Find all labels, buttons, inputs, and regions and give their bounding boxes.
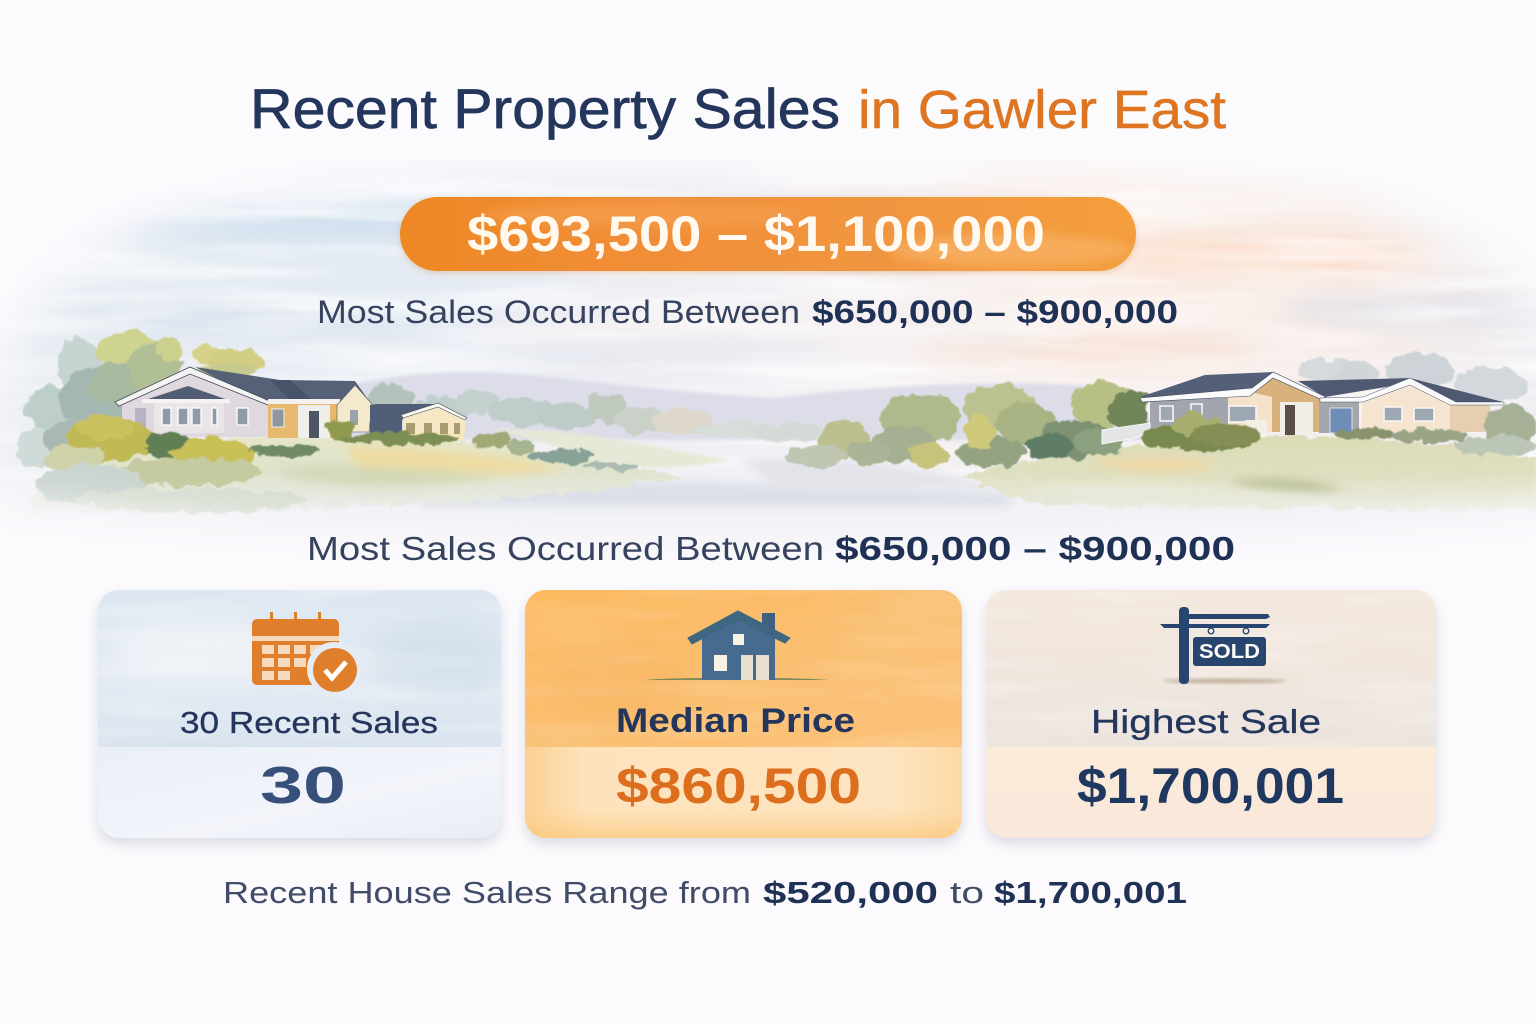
footer range statement: to — [950, 875, 984, 910]
panel: median price — [525, 590, 962, 838]
subheading: most sales upper: $650,000 – $900,000 — [812, 294, 1178, 330]
label: median price: Median Price — [616, 702, 855, 740]
icon: house — [645, 611, 828, 680]
landscape illustration — [0, 172, 1536, 530]
right bushes — [1140, 406, 1536, 455]
small right house on left — [370, 403, 467, 440]
footer range statement: $520,000 — [763, 875, 938, 910]
footer range statement: Recent House Sales Range from — [223, 875, 751, 910]
ground washes — [422, 456, 1149, 514]
title: Recent Property Sales — [250, 77, 840, 140]
distant hills — [340, 372, 1180, 440]
value: 30: 30 — [260, 757, 346, 815]
background tree line — [366, 352, 1528, 441]
sky with watercolor clouds — [0, 172, 1536, 486]
title — [250, 77, 1226, 140]
panel: recent sales — [98, 590, 510, 838]
icon: calendar with check — [252, 612, 361, 696]
footer range statement: $1,700,001 — [994, 875, 1187, 910]
left trees — [16, 331, 263, 468]
subheading: most sales lower — [307, 530, 1235, 567]
icon: sold sign: SOLD — [1199, 641, 1260, 663]
right hill — [960, 436, 1536, 512]
subheading: most sales upper — [317, 294, 1178, 330]
label: highest sale: Highest Sale — [1091, 703, 1321, 740]
icon: sold sign — [1160, 607, 1287, 684]
right trees — [785, 382, 1150, 467]
label: 30 recent sales: 30 Recent Sales — [180, 705, 438, 740]
value: median price: $860,500 — [616, 758, 861, 814]
panel: highest sale — [986, 590, 1436, 838]
footer range statement — [223, 875, 1187, 910]
price range pill — [400, 197, 1136, 271]
subheading: most sales upper: Most Sales Occurred Between — [317, 294, 800, 330]
subheading: most sales lower: Most Sales Occurred Between — [307, 530, 824, 567]
value: highest sale: $1,700,001 — [1077, 758, 1344, 814]
price range pill: $693,500 – $1,100,000 — [467, 206, 1045, 262]
left hill — [30, 429, 730, 513]
title: in Gawler East — [858, 80, 1226, 140]
left house — [115, 367, 372, 438]
right house — [1102, 372, 1504, 444]
subheading: most sales lower: $650,000 – $900,000 — [835, 530, 1235, 567]
left bushes — [35, 415, 636, 512]
